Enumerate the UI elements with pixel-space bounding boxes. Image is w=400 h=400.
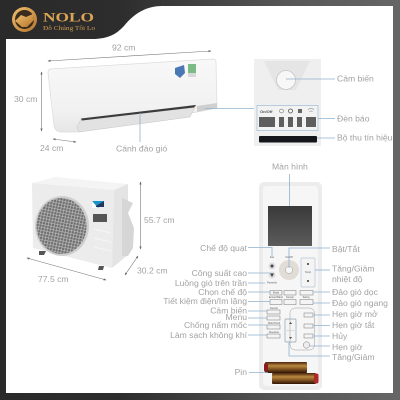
callout: screen: Màn hình [272, 162, 308, 172]
sensor recess [264, 61, 310, 90]
outdoor unit [32, 177, 134, 270]
dimension: outdoor width: 77.5 cm [38, 274, 69, 284]
inverter badge [93, 214, 107, 222]
temperature buttons: Temp [305, 271, 312, 274]
callout: increase decrease: Tăng/Giảm [332, 352, 375, 362]
battery 1 [264, 362, 307, 373]
battery 2 [272, 373, 318, 384]
callout: cancel: Hủy [332, 331, 348, 341]
screen [268, 206, 312, 246]
callout: timer off: Hẹn giờ tắt [332, 320, 375, 330]
fan and powerful buttons: Fan [270, 256, 275, 259]
callout: powerful: Công suất cao [192, 268, 247, 278]
callout: temperature [315, 264, 375, 284]
dimension: width 92 cm: 92 cm [112, 42, 135, 52]
callout: menu: Menu [226, 312, 247, 322]
callout: battery [235, 367, 268, 377]
callout: vertical swing: Đảo gió dọc [332, 287, 379, 297]
dimension: height 30 cm [14, 72, 42, 131]
callout: horizontal swing: Đảo gió ngang [332, 298, 388, 308]
energy badges [175, 64, 196, 78]
panel background [254, 59, 321, 146]
top button rows: Econo/Silent [269, 296, 283, 299]
callout: menu [226, 312, 267, 322]
callout: indicator [318, 114, 370, 124]
indoor control panel detail [254, 59, 321, 146]
callout: screen [272, 162, 308, 206]
callout: sensor: Cảm biến [337, 74, 374, 84]
dimension: outdoor height: 55.7 cm [144, 215, 175, 225]
callout: air flap to panel connector [205, 108, 254, 110]
callout: power: Bật/Tắt [332, 244, 360, 254]
remote control [259, 182, 322, 390]
fan and powerful buttons: Powerful [267, 282, 277, 284]
dimension: depth 24 cm [40, 139, 76, 153]
dimension: outdoor height [140, 182, 175, 249]
dimension: depth 24 cm: 24 cm [40, 143, 63, 153]
left function buttons: Streamer [269, 331, 279, 334]
up down buttons [285, 319, 296, 342]
callout: mold proof: Chống nấm mốc [184, 320, 248, 330]
indicator box: On/Off [260, 109, 273, 114]
air flap [77, 105, 196, 132]
top button rows [269, 290, 313, 304]
left function buttons: Sensor [270, 307, 278, 310]
callout: battery: Pin [235, 367, 247, 377]
top button rows: Swing [303, 296, 310, 299]
fan and powerful buttons [267, 256, 277, 284]
dimension: height 30 cm: 30 cm [14, 94, 37, 104]
indoor unit body [48, 59, 217, 132]
dimension: outdoor width [27, 258, 106, 284]
callout: fan mode: Chế độ quạt [200, 243, 248, 253]
top button rows: Sensor [286, 296, 294, 299]
dimension: outdoor depth [125, 256, 168, 276]
callout: cancel [313, 331, 348, 341]
callout: indicator: Đèn báo [337, 114, 370, 124]
callout: vertical swing [313, 287, 379, 297]
dimension: width 92 cm [48, 42, 211, 61]
logo: Nolo brand [12, 7, 95, 32]
left function buttons [267, 307, 280, 338]
top button rows: Mode [273, 292, 280, 295]
callout: power [289, 244, 360, 268]
callout: sensor button [210, 306, 267, 316]
outdoor unit front [32, 183, 114, 268]
callout: timer off [313, 320, 375, 330]
callout: air flap: Cánh đảo gió [116, 144, 167, 154]
callout: air flap [116, 113, 167, 154]
batteries [264, 362, 318, 384]
callout: fan mode [200, 243, 272, 256]
logo tagline: Đỗ Chúng Tôi Lo [43, 25, 95, 32]
callout: temperature: Tăng/Giảm [332, 264, 375, 274]
callout: sensor [286, 74, 374, 84]
logo emblem [12, 7, 37, 32]
feet [39, 251, 104, 270]
remote body [259, 182, 322, 390]
callout: air purify: Làm sạch không khí [170, 330, 248, 340]
callout: timer on: Hẹn giờ mở [332, 309, 378, 319]
callout: timer [310, 342, 363, 352]
service valve cover [122, 198, 134, 256]
callout: sensor button: Cảm biến [210, 306, 247, 316]
temperature buttons [301, 258, 315, 287]
outdoor unit top [32, 177, 128, 190]
signal receiver [259, 136, 317, 142]
callout: mode: Chọn chế độ [198, 287, 247, 297]
callout: econo silent: Tiết kiệm điện/Im lặng [163, 296, 247, 306]
callout: increase decrease [289, 342, 375, 362]
callout: temperature: nhiệt độ [332, 274, 363, 284]
dimension: outdoor depth: 30.2 cm [137, 266, 168, 276]
power button: On/Off [285, 256, 293, 259]
Daikin logo [92, 201, 104, 208]
outdoor unit side [112, 184, 128, 268]
timer group [290, 308, 314, 350]
power button [279, 256, 299, 280]
callout: timer: Hẹn giờ [332, 342, 363, 352]
callout: ceiling airflow: Luồng gió trên trần [175, 278, 247, 288]
left function buttons: Mold Proof [268, 322, 280, 325]
logo wordmark: NOLO [43, 10, 94, 24]
callout: mode [198, 287, 270, 297]
indoor unit [48, 59, 217, 132]
callout: signal receiver: Bộ thu tín hiệu [337, 132, 393, 142]
front grille lines [94, 229, 111, 251]
fan grille [35, 196, 89, 256]
sensor [276, 70, 296, 90]
right end shading [197, 103, 217, 112]
